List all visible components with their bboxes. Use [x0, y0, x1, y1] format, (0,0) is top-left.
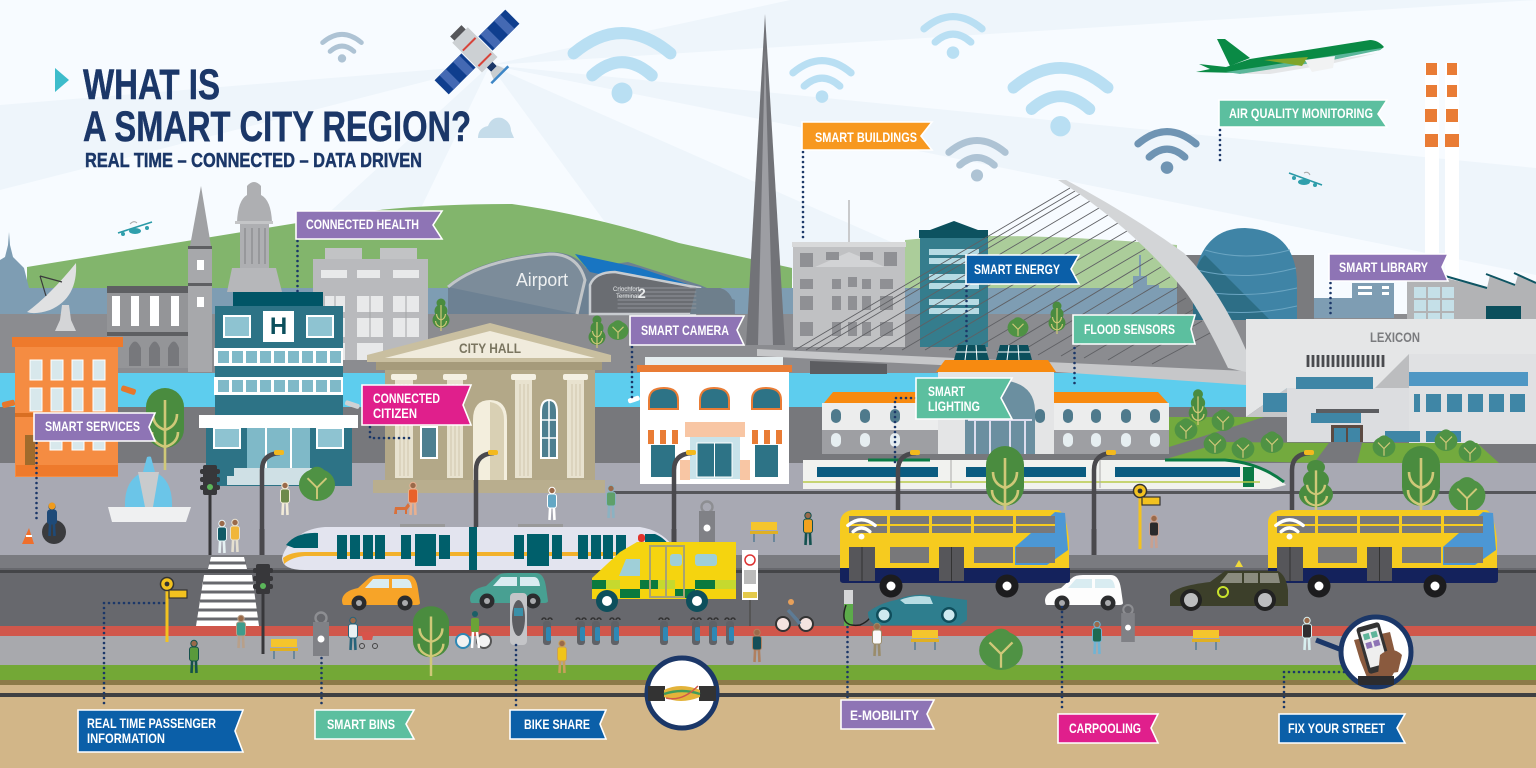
- intercity train: [610, 460, 1536, 494]
- lower grey band: [0, 407, 1536, 464]
- icon: drone right: [1289, 172, 1322, 187]
- label: connected citizen: CITIZEN: [373, 405, 417, 421]
- label: smart bins: SMART BINS: [327, 716, 395, 732]
- label: smart lighting: SMART: [928, 383, 965, 399]
- road worker and cone: [22, 502, 66, 544]
- cycle lane: [0, 626, 1536, 636]
- icon: cloud: [478, 118, 514, 138]
- bench upper: [750, 522, 778, 542]
- smart buildings block: [792, 200, 906, 347]
- spire: [746, 14, 785, 345]
- label: smart services: [34, 413, 155, 441]
- label: connected health: CONNECTED HEALTH: [306, 216, 419, 232]
- tree by orange building: [146, 388, 184, 470]
- chimneys: [1425, 63, 1459, 293]
- tram: [282, 524, 672, 570]
- river: [0, 373, 1536, 407]
- station building: [822, 360, 1169, 454]
- label: air quality monitoring: [1219, 100, 1387, 127]
- icon: drone left: [118, 222, 152, 236]
- label: real time passenger information: [78, 710, 243, 752]
- label: smart buildings: [802, 122, 932, 150]
- Lexicon sign: LEXICON: [1370, 329, 1420, 345]
- label: smart camera: SMART CAMERA: [641, 322, 729, 338]
- wifi signals: [323, 17, 1196, 181]
- title: WHAT IS: [83, 61, 220, 109]
- soil strip: [0, 680, 1536, 685]
- title block: [55, 61, 471, 172]
- church: [107, 186, 212, 372]
- terminal sign: 2: [638, 285, 646, 301]
- Samuel Beckett bridge: [757, 180, 1246, 385]
- ground: [0, 685, 1536, 768]
- label: carpooling: [1058, 714, 1158, 743]
- title: A SMART CITY REGION?: [83, 103, 471, 151]
- icon: solar panels: [954, 345, 1032, 360]
- label: smart energy: [966, 255, 1079, 284]
- domed building: [227, 182, 282, 292]
- cyclist near kiosk: [456, 611, 491, 648]
- title marker: [55, 68, 69, 92]
- label: e-mobility: [841, 700, 934, 729]
- Lexicon library: [1246, 319, 1536, 444]
- upper pavement: [0, 463, 1536, 555]
- label: smart buildings: SMART BUILDINGS: [815, 129, 917, 145]
- blue-grey skyline band: [0, 288, 1245, 318]
- electric charge point: [844, 590, 875, 626]
- label: real time passenger information: REAL TIME PASSENGER: [87, 715, 216, 731]
- small trees mid-ground: [299, 298, 1481, 501]
- icon: CCTV camera by hospital: [344, 400, 360, 409]
- label: connected citizen: CONNECTED: [373, 390, 440, 406]
- label: connected health: [296, 211, 442, 239]
- taxi: [1170, 560, 1288, 611]
- electric car: [868, 595, 967, 625]
- fountain: [108, 456, 191, 522]
- bus two: [1268, 510, 1498, 598]
- distant tower silhouette: [1122, 255, 1168, 318]
- airport sign: Airport: [516, 270, 568, 290]
- orange building: [12, 337, 123, 477]
- icon: satellite dish: [27, 263, 76, 331]
- terminal sign: [613, 285, 646, 301]
- bus stop upper: [1134, 484, 1160, 549]
- zebra crossing: [196, 557, 259, 626]
- title: [83, 61, 471, 172]
- entrance path: [1314, 443, 1362, 463]
- distant blue building: [1314, 283, 1394, 318]
- hospital H sign: [263, 311, 294, 342]
- label: air quality monitoring: AIR QUALITY MONITORING: [1229, 105, 1373, 121]
- label: fix your street: [1279, 714, 1405, 743]
- lamp posts: [260, 450, 1314, 555]
- label: smart camera: [630, 316, 744, 345]
- grass strip: [0, 665, 1536, 680]
- sky rays: [0, 0, 1536, 290]
- cyclist near charge point: [776, 599, 813, 631]
- label: smart services: SMART SERVICES: [45, 418, 140, 434]
- road kerb and tram rail: [0, 555, 1536, 573]
- road: [0, 555, 1536, 626]
- street furniture lower: [270, 605, 1220, 676]
- icon: CCTV cameras on orange building: [1, 385, 137, 408]
- white car: [1045, 575, 1123, 610]
- traffic light upper: [200, 465, 220, 555]
- teal car: [470, 573, 548, 608]
- label: bike share: BIKE SHARE: [524, 716, 590, 732]
- label: connected citizen: [362, 385, 471, 425]
- label: smart library: SMART LIBRARY: [1339, 259, 1429, 275]
- terminal sign: Críochfort: [613, 287, 640, 293]
- pale hill behind bridge: [905, 236, 1177, 320]
- label: smart lighting: LIGHTING: [928, 398, 980, 414]
- lower pavement: [0, 636, 1536, 665]
- label: smart energy: SMART ENERGY: [974, 261, 1060, 277]
- hospital building: [199, 292, 358, 486]
- label: carpooling: CARPOOLING: [1069, 720, 1141, 736]
- icon: airplane: [1196, 39, 1384, 74]
- traffic light lower: [253, 564, 273, 654]
- factory: [1407, 273, 1536, 320]
- grey city band: [0, 314, 1536, 374]
- pedestrians: [190, 482, 1312, 673]
- icon: phone in hand circle: [1316, 617, 1411, 687]
- label: e-mobility: E-MOBILITY: [850, 707, 920, 723]
- bus one: [840, 510, 1070, 598]
- label: flood sensors: FLOOD SENSORS: [1084, 321, 1175, 337]
- dotted connector lines: [36, 130, 1344, 712]
- label: smart library: [1329, 254, 1448, 281]
- dog: [394, 503, 410, 514]
- riverside grass: [1166, 417, 1499, 463]
- airport: [448, 252, 735, 314]
- label: smart bins: [315, 710, 414, 739]
- hospital H sign: H: [270, 313, 287, 340]
- far-left dome silhouette: [0, 232, 30, 292]
- bike share docks: [542, 618, 735, 645]
- parking sign: [742, 550, 758, 626]
- icon: data cable circle: [647, 658, 717, 728]
- grey office building: [313, 248, 428, 360]
- title: REAL TIME – CONNECTED – DATA DRIVEN: [85, 150, 422, 172]
- label: bike share: [510, 710, 606, 739]
- label: real time passenger information: INFORMATION: [87, 730, 165, 746]
- label: flood sensors: [1073, 315, 1195, 344]
- icon: smart camera: [627, 395, 640, 404]
- city hall sign: CITY HALL: [459, 340, 521, 356]
- orange car: [342, 575, 420, 610]
- underground cable line: [0, 693, 1536, 697]
- city hall: [367, 323, 611, 493]
- label: smart lighting: [916, 378, 1012, 419]
- green hill: [27, 204, 792, 330]
- convention centre: [1177, 228, 1314, 320]
- bus stop lower: [160, 578, 187, 642]
- icon: satellite: [420, 0, 536, 111]
- ambulance: [592, 534, 736, 612]
- label: fix your street: FIX YOUR STREET: [1288, 720, 1385, 736]
- bike share kiosk: [510, 593, 527, 645]
- sky background: [0, 0, 1536, 320]
- teal tower: [919, 221, 988, 347]
- pram: [360, 632, 378, 648]
- terminal sign: Terminal: [616, 294, 639, 300]
- big trees upper pavement: [986, 446, 1485, 528]
- recycling bin upper: [699, 502, 715, 545]
- shop building: [637, 357, 792, 484]
